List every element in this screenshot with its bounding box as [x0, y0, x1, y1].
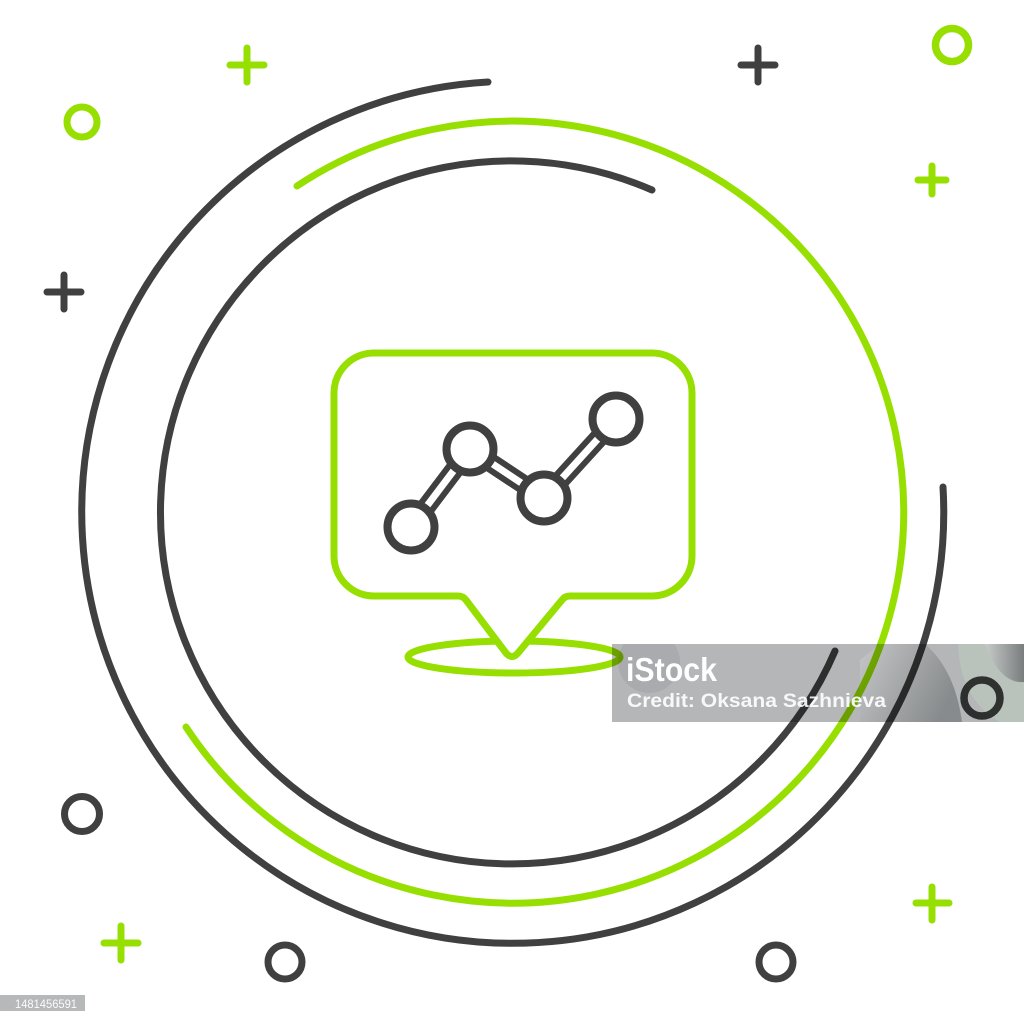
image id tag	[0, 995, 85, 1011]
map pin base ellipse	[408, 641, 620, 673]
chart connector lines	[411, 419, 616, 527]
watermark band	[612, 644, 1024, 722]
watermark credit: Credit: Oksana Sazhnieva	[627, 691, 886, 712]
inner dark ring arc	[160, 161, 835, 864]
line chart icon	[388, 396, 640, 550]
green ring arc	[186, 121, 904, 903]
outer dark ring arc	[82, 82, 944, 943]
watermark logo: iStock	[626, 651, 718, 688]
chart data points	[388, 396, 640, 550]
speech bubble pin	[334, 353, 692, 656]
image id tag: 1481456591	[15, 997, 77, 1011]
